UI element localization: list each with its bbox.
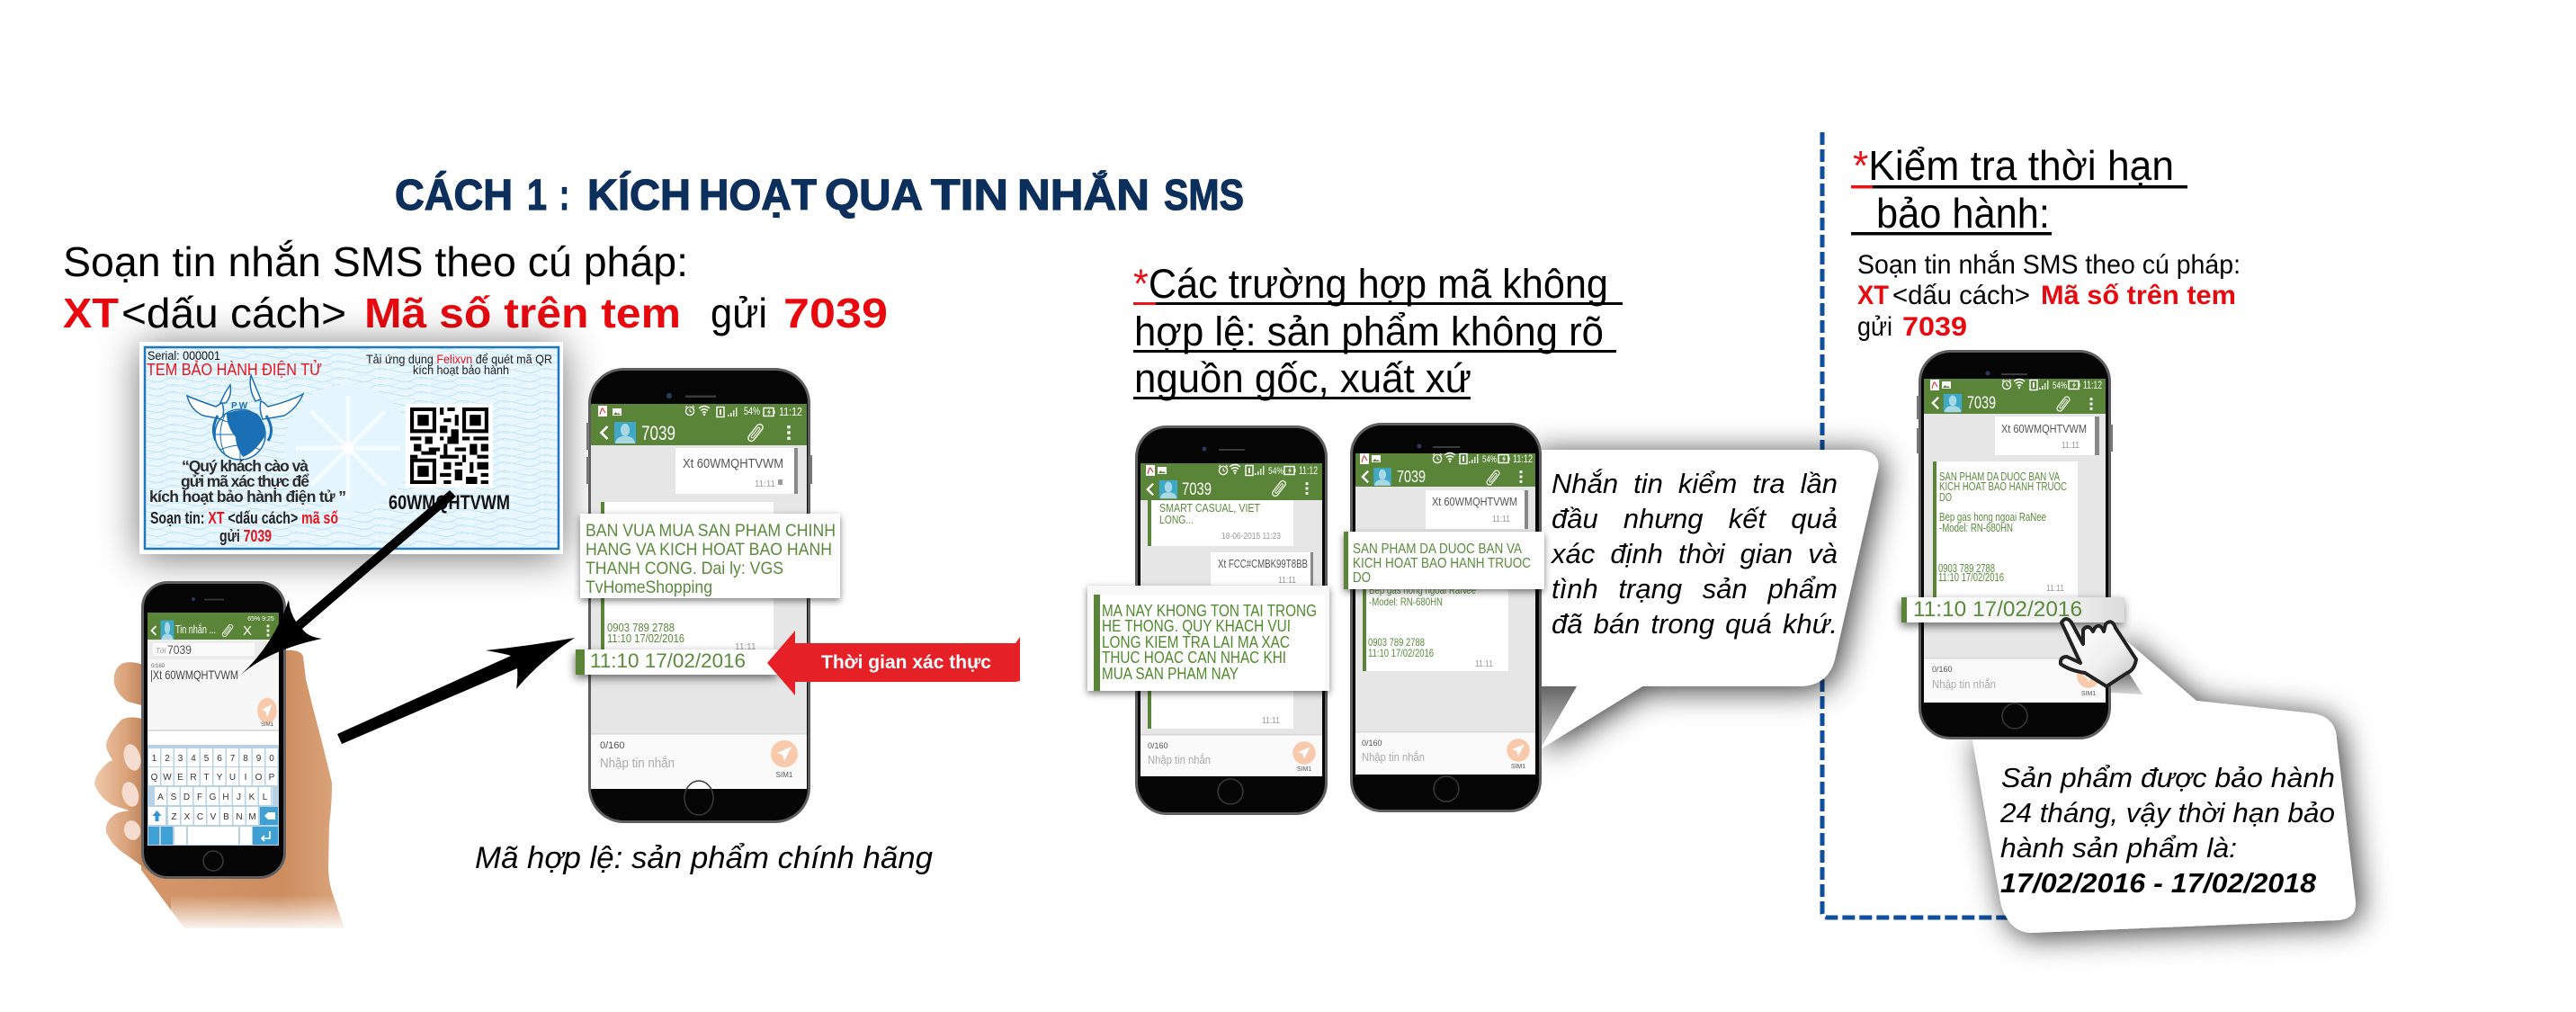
arrow: phone to result	[337, 638, 575, 744]
callout: code not found message: MA NAY KHONG TON TAI TRONG	[1102, 602, 1317, 620]
text block: repeat check explanation: tình trạng sản phẩm	[1552, 573, 1838, 605]
sent message: 11:11	[755, 479, 775, 489]
sticker quote text	[149, 457, 346, 506]
phone: product already sold	[1351, 425, 1540, 811]
instruction line 2	[63, 290, 888, 336]
callout: activation message: HANG VA KICH HOAT BAO HANH	[586, 540, 832, 560]
received message: -Model: RN-680HN	[1369, 596, 1443, 608]
phone: composing SMS with keyboard	[142, 583, 284, 878]
received message: Bep gas hong ngoai RaNee	[1369, 584, 1476, 596]
received message: 11:11	[1475, 659, 1493, 669]
fingers	[94, 662, 148, 871]
received message	[1933, 461, 2078, 597]
sticker quote text: “Quý khách cào và	[182, 457, 309, 475]
title: SMS	[1164, 172, 1244, 219]
app bar	[148, 613, 279, 640]
instruction: warranty check syntax: <dấu cách>	[1892, 281, 2030, 310]
bubble tail fold	[2111, 670, 2142, 694]
home button	[684, 781, 713, 815]
home button	[1434, 776, 1459, 802]
keyboard: ZXCVBNM	[171, 812, 256, 822]
fingernails	[120, 742, 144, 842]
input bar: 0/160	[1148, 741, 1168, 750]
older received message: LONG...	[1159, 513, 1194, 526]
app bar: 7039	[641, 422, 675, 444]
warranty explanation text	[1999, 762, 2335, 899]
input bar: SIM1	[1511, 764, 1525, 770]
app bar: 54%	[1268, 466, 1284, 477]
callout: code not found message: MUA SAN PHAM NAY	[1102, 665, 1239, 683]
input bar	[1924, 658, 2106, 703]
camera and speaker	[1202, 446, 1245, 452]
arrow: red verification time label	[767, 631, 1020, 695]
callout: code not found message: THUC HOAC CAN NHAC KHI	[1102, 649, 1286, 667]
app bar: 7039	[1182, 480, 1212, 499]
sent message: 11:11	[1492, 515, 1510, 524]
received message: 11:10 17/02/2016	[607, 631, 684, 645]
sent message	[1995, 416, 2099, 455]
sticker quote text: kích hoạt bảo hành điện tử ”	[149, 488, 346, 506]
sent message: Xt 60WMQHTVWM	[683, 456, 783, 471]
warranty explanation text: 17/02/2016 - 17/02/2018	[2000, 867, 2317, 899]
input bar: Nhập tin nhắn	[600, 756, 675, 771]
app bar: 11:12	[779, 405, 802, 418]
input bar: 0/160	[1932, 665, 1953, 674]
instruction: warranty check syntax: 7039	[1902, 312, 1967, 342]
callout: activation message	[580, 514, 840, 598]
title: :	[559, 172, 569, 219]
reply remainder: 11:11	[1262, 716, 1280, 726]
sent message: Xt 60WMQHTVWM	[2001, 422, 2087, 435]
camera and speaker	[1418, 444, 1460, 448]
rosette watermark	[284, 384, 412, 512]
input bar: SIM1	[2081, 691, 2096, 697]
received message: 11:11	[735, 642, 756, 652]
keyboard: 1234567890	[152, 754, 274, 764]
decorative frame line	[1822, 132, 2015, 918]
app bar: 7039	[1397, 468, 1426, 486]
home button	[1218, 779, 1243, 804]
received message	[1363, 576, 1508, 671]
icon: globe logo with doves	[187, 375, 303, 460]
text block: repeat check explanation: đã bán trong quá khứ.	[1552, 608, 1838, 640]
callout: activation message: TvHomeShopping	[586, 578, 712, 597]
input bar: SIM1	[1297, 766, 1311, 773]
callout: code not found message: LONG KIEM TRA LAI MA XAC	[1102, 633, 1290, 651]
arrow: sticker code to phone	[241, 490, 456, 675]
app bar	[1140, 463, 1322, 500]
instruction line 2: XT	[63, 290, 119, 336]
sent message	[675, 448, 798, 494]
callout: already sold message: DO	[1353, 570, 1371, 586]
home button	[203, 851, 223, 871]
callout: activation message: THANH CONG. Dai ly: VGS	[586, 559, 783, 578]
app bar: 65% 9:25	[247, 616, 274, 622]
callout: code not found message	[1087, 586, 1329, 691]
warranty explanation text: Sản phẩm được bảo hành	[2001, 762, 2335, 793]
title	[395, 170, 1244, 219]
warranty explanation text: 24 tháng, vậy thời hạn bảo	[1999, 797, 2335, 828]
message draft: 0/160	[151, 664, 165, 669]
sticker sms instruction: gửi 7039	[219, 527, 272, 545]
sent invalid code: 11:11	[1278, 576, 1296, 586]
instruction line 2: <dấu cách>	[121, 290, 346, 336]
app bar: 7039	[1967, 394, 1996, 413]
instruction: warranty check syntax: XT	[1857, 281, 1889, 310]
icon: QR code	[406, 404, 493, 488]
heading: invalid code cases: hợp lệ: sản phẩm không rõ	[1134, 309, 1604, 354]
text block: repeat check explanation: đầu nhưng kết quả	[1552, 503, 1838, 534]
camera and speaker	[1986, 371, 2027, 376]
callout: code not found message: HE THONG. QUY KHACH VUI	[1102, 617, 1291, 635]
heading: check warranty period	[1851, 142, 2187, 237]
input bar	[1140, 734, 1322, 776]
received message: SAN PHAM DA DUOC BAN VA	[1939, 470, 2061, 483]
sticker text top right: kích hoạt bảo hành	[413, 363, 509, 377]
received message: KICH HOAT BAO HANH TRUOC	[1939, 480, 2067, 493]
app bar	[591, 404, 807, 445]
keyboard: QWERTYUIOP	[151, 773, 275, 783]
recipient row: 7039	[167, 642, 192, 657]
instruction heading: SMS syntax	[63, 238, 888, 336]
instruction line 1: Soạn tin nhắn SMS theo cú pháp:	[63, 238, 688, 285]
home button	[2002, 703, 2027, 729]
caption: valid code: Mã hợp lệ: sản phẩm chính hãng	[475, 841, 933, 875]
received message: 11:10 17/02/2016	[1368, 647, 1434, 659]
title: NHẮN	[1017, 170, 1149, 219]
instruction line 2: Mã số trên tem	[364, 290, 681, 336]
app bar	[1924, 379, 2106, 414]
received message	[601, 502, 774, 659]
message draft: SIM1	[261, 722, 274, 728]
phone: warranty check result	[1917, 351, 2113, 738]
app bar: Tin nhắn ...	[175, 622, 216, 636]
input bar	[1355, 731, 1535, 775]
sticker quote text: gửi mã xác thực để	[181, 472, 309, 490]
sent message: Xt 60WMQHTVWM	[1432, 495, 1517, 508]
keyboard: ASDFGHJKL	[157, 793, 268, 802]
callout: already sold message: SAN PHAM DA DUOC BAN VA	[1353, 542, 1523, 557]
input bar: 0/160	[600, 740, 625, 751]
callout: activation message: BAN VUA MUA SAN PHAM CHINH	[586, 521, 836, 541]
keyboard	[148, 745, 279, 846]
sticker text top left: Serial: 000001	[148, 348, 220, 363]
icon: globe logo with doves: PW	[231, 401, 249, 411]
instruction: warranty check syntax: gửi	[1857, 312, 1892, 342]
title: TIN	[931, 172, 1008, 219]
input bar: Nhập tin nhắn	[1148, 753, 1211, 766]
phone: code not found	[1137, 426, 1326, 813]
heading: check warranty period: *Kiểm tra thời hạn	[1853, 142, 2174, 189]
input bar: Nhập tin nhắn	[1362, 750, 1425, 764]
sent invalid code	[1211, 552, 1313, 588]
heading: invalid code cases: *Các trường hợp mã không	[1133, 261, 1608, 307]
icon: pointing hand cursor	[2061, 619, 2136, 686]
callout: activation time strip	[576, 649, 778, 675]
input bar: Nhập tin nhắn	[1932, 677, 1996, 691]
callout: already sold message: KICH HOAT BAO HANH TRUOC	[1353, 556, 1531, 571]
input bar: 0/160	[1362, 739, 1382, 748]
sticker text top right: Tải ứng dụng Felixvn để quét mã QR	[366, 352, 552, 366]
sticker sms instruction: Soạn tin: XT <dấu cách> mã số	[150, 509, 338, 527]
text block: repeat check explanation: Nhắn tin kiểm tra lần	[1552, 468, 1838, 499]
sticker text top left	[147, 348, 322, 379]
older received message	[1148, 500, 1293, 546]
received message: Bep gas hong ngoai RaNee	[1939, 511, 2046, 524]
app bar	[1355, 452, 1535, 487]
sent message: 11:11	[2062, 441, 2080, 451]
received message: 11:11	[2046, 584, 2064, 594]
message draft: |Xt 60WMQHTVWM	[150, 667, 238, 682]
app bar: 11:12	[1513, 452, 1533, 465]
speech bubble: repeat check explanation	[1529, 450, 1878, 748]
instruction: warranty check syntax	[1857, 250, 2241, 342]
palm	[141, 650, 344, 928]
camera and speaker	[666, 393, 716, 399]
instruction: warranty check syntax: Mã số trên tem	[2041, 281, 2236, 310]
instruction line 2: 7039	[783, 290, 888, 336]
arrow: red verification time label: Thời gian xác thực	[821, 652, 991, 673]
text block: repeat check explanation	[1551, 468, 1838, 640]
sticker sms instruction	[150, 509, 338, 545]
instruction: warranty check syntax: Soạn tin nhắn SMS theo cú pháp:	[1857, 250, 2241, 280]
title: 1	[527, 172, 547, 219]
received message: DO	[1939, 491, 1952, 504]
heading: invalid code cases: nguồn gốc, xuất xứ	[1134, 355, 1471, 401]
heading: check warranty period: bảo hành:	[1876, 190, 2050, 237]
received message: 11:10 17/02/2016	[1938, 571, 2004, 584]
heading: invalid code cases	[1133, 261, 1623, 401]
app bar: 11:12	[1299, 464, 1318, 477]
message draft	[148, 664, 279, 745]
title: KÍCH	[587, 171, 691, 219]
app bar: 54%	[744, 405, 760, 417]
title: HOẠT	[699, 172, 817, 219]
received message: 0903 789 2788	[1368, 636, 1425, 649]
warranty explanation text: hành sản phẩm là:	[2000, 832, 2237, 864]
text block: repeat check explanation: xác định thời gian và	[1552, 538, 1838, 569]
speech bubble: warranty period	[1972, 637, 2356, 933]
instruction line 2: gửi	[711, 290, 767, 336]
title: CÁCH	[395, 171, 513, 219]
callout: warranty date strip: 11:10 17/02/2016	[1913, 597, 2082, 622]
older received message: 18-06-2015 11:23	[1221, 532, 1281, 542]
sent message	[1426, 490, 1528, 529]
hand holding phone	[94, 650, 351, 933]
received message: 0903 789 2788	[607, 621, 675, 634]
sticker code: 60WMQHTVWM	[389, 491, 510, 514]
title: QUA	[825, 172, 923, 219]
panel: warranty sticker card	[139, 342, 563, 554]
input bar: SIM1	[776, 771, 793, 779]
wrist fade	[171, 895, 351, 933]
app bar: X	[243, 623, 252, 639]
older received message: SMART CASUAL, VIET	[1159, 501, 1260, 515]
callout: already sold message	[1344, 532, 1544, 589]
recipient row	[148, 640, 279, 659]
app bar: 54%	[1482, 454, 1497, 465]
app bar: 54%	[2053, 381, 2067, 391]
input bar	[591, 733, 807, 789]
received message: 0903 789 2788	[1938, 562, 1995, 575]
received message: -Model: RN-680HN	[1939, 522, 2013, 534]
recipient row: Tới	[156, 647, 166, 655]
sticker text top right	[366, 352, 552, 377]
camera and speaker	[192, 597, 224, 601]
callout: activation time strip: 11:10 17/02/2016	[590, 649, 746, 672]
phone: valid code result	[586, 369, 812, 822]
sticker text top left: TEM BẢO HÀNH ĐIỆN TỬ	[147, 360, 322, 379]
app bar: 11:12	[2083, 379, 2102, 391]
reply remainder	[1148, 684, 1293, 729]
sent invalid code: Xt FCC#CMBK99T8BB	[1218, 557, 1308, 570]
